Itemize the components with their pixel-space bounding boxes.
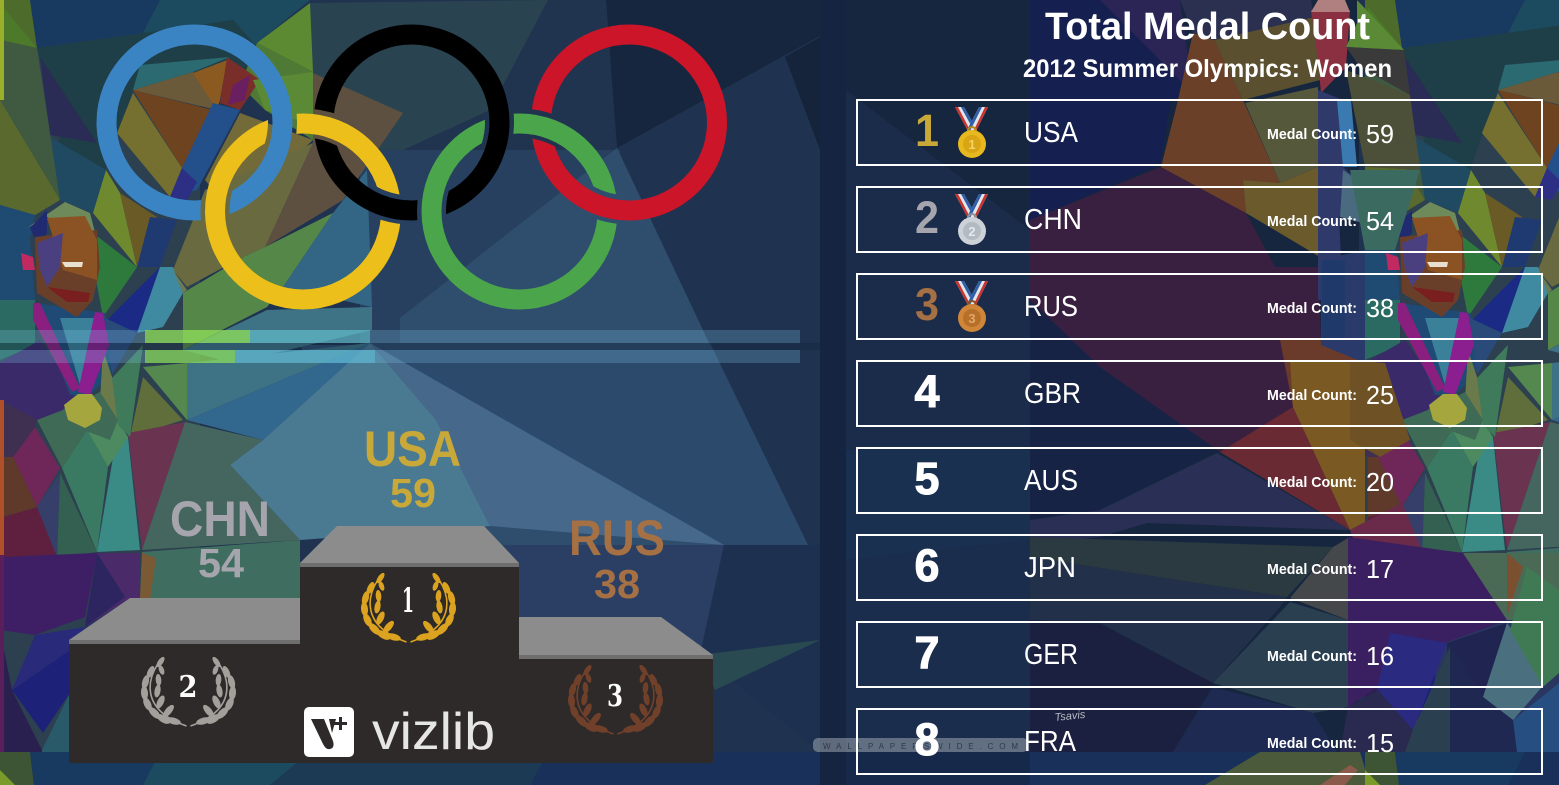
laurel wreath: second place: 2 [178, 670, 198, 705]
row 5: AUS: 5 [914, 453, 940, 504]
podium label: CHN 54 [170, 491, 270, 586]
row 1: USA: 59 [1366, 119, 1394, 149]
podium label: RUS 38: RUS [569, 510, 665, 566]
row 6: JPN: 17 [1366, 554, 1394, 584]
row 1: USA: Medal Count: [1267, 126, 1357, 143]
row 7: GER: 7 [914, 627, 940, 678]
icon: silver medal [955, 194, 988, 245]
row 5: AUS: AUS [1024, 465, 1078, 497]
row 8: FRA: FRA [1024, 726, 1077, 758]
row 4: GBR: Medal Count: [1267, 387, 1357, 404]
row 4: GBR: 4 [914, 366, 940, 417]
row 4: GBR: GBR [1024, 378, 1081, 410]
row 3: RUS [857, 274, 1542, 339]
row 5: AUS: 20 [1366, 467, 1394, 497]
row 6: JPN: 6 [914, 540, 940, 591]
artist signature: Tsavis [1054, 709, 1086, 724]
podium label: USA 59: USA [364, 421, 461, 477]
row 3: RUS: 38 [1366, 293, 1394, 323]
row 5: AUS [857, 448, 1542, 513]
row 8: FRA [857, 709, 1542, 774]
podium label: RUS 38: 38 [594, 561, 640, 607]
row 2: CHN: Medal Count: [1267, 213, 1357, 230]
laurel wreath: first place: 1 [402, 581, 414, 621]
row 6: JPN: Medal Count: [1267, 561, 1357, 578]
row 2: CHN: 2 [915, 192, 939, 243]
laurel wreath: second place [140, 656, 237, 726]
row 3: RUS: RUS [1024, 291, 1078, 323]
icon: silver medal: 2 [968, 224, 976, 239]
row 7: GER: Medal Count: [1267, 648, 1357, 665]
yellow ring [215, 124, 391, 300]
podium third place step [519, 617, 713, 763]
row 1: USA: 1 [915, 105, 939, 156]
row 7: GER [857, 622, 1542, 687]
podium label: USA 59 [364, 421, 461, 516]
podium label: CHN 54: 54 [198, 540, 244, 586]
podium label: USA 59: 59 [390, 470, 436, 516]
blue ring [106, 34, 282, 210]
green ring [432, 124, 608, 300]
row 8: FRA: 15 [1366, 728, 1394, 758]
vizlib logo [304, 703, 495, 761]
subtitle: 2012 Summer Olympics: Women [1023, 55, 1392, 83]
black ring [324, 34, 500, 210]
watermark [813, 738, 1028, 752]
Olympic rings logo [106, 34, 717, 300]
podium second place step [69, 598, 300, 763]
icon: gold medal [955, 107, 988, 158]
podium first place step [300, 526, 519, 763]
laurel wreath: third place: 3 [607, 679, 623, 714]
red ring [541, 34, 717, 210]
row 4: GBR [857, 361, 1542, 426]
vizlib logo: vizlib [372, 703, 495, 761]
podium [69, 526, 713, 763]
icon: bronze medal [955, 281, 988, 332]
icon: bronze medal: 3 [968, 311, 976, 326]
row 2: CHN: 54 [1366, 206, 1394, 236]
row 7: GER: GER [1024, 639, 1078, 671]
row 7: GER: 16 [1366, 641, 1394, 671]
laurel wreath: first place [360, 572, 457, 642]
row 2: CHN [857, 187, 1542, 252]
leaderboard [857, 100, 1542, 774]
row 2: CHN: CHN [1024, 204, 1082, 236]
icon: gold medal: 1 [968, 137, 976, 152]
row 8: FRA: 8 [914, 714, 940, 765]
row 6: JPN [857, 535, 1542, 600]
row 3: RUS: Medal Count: [1267, 300, 1357, 317]
row 1: USA [857, 100, 1542, 165]
row 5: AUS: Medal Count: [1267, 474, 1357, 491]
row 8: FRA: Medal Count: [1267, 735, 1357, 752]
row 1: USA: USA [1024, 117, 1079, 149]
row 6: JPN: JPN [1024, 552, 1076, 584]
laurel wreath: third place [567, 664, 664, 734]
title: Total Medal Count [1045, 6, 1370, 48]
row 3: RUS: 3 [915, 279, 939, 330]
podium label: CHN 54: CHN [170, 491, 270, 547]
row 4: GBR: 25 [1366, 380, 1394, 410]
podium label: RUS 38 [569, 510, 665, 607]
watermark: WALLPAPERSWIDE.COM [823, 742, 1018, 751]
